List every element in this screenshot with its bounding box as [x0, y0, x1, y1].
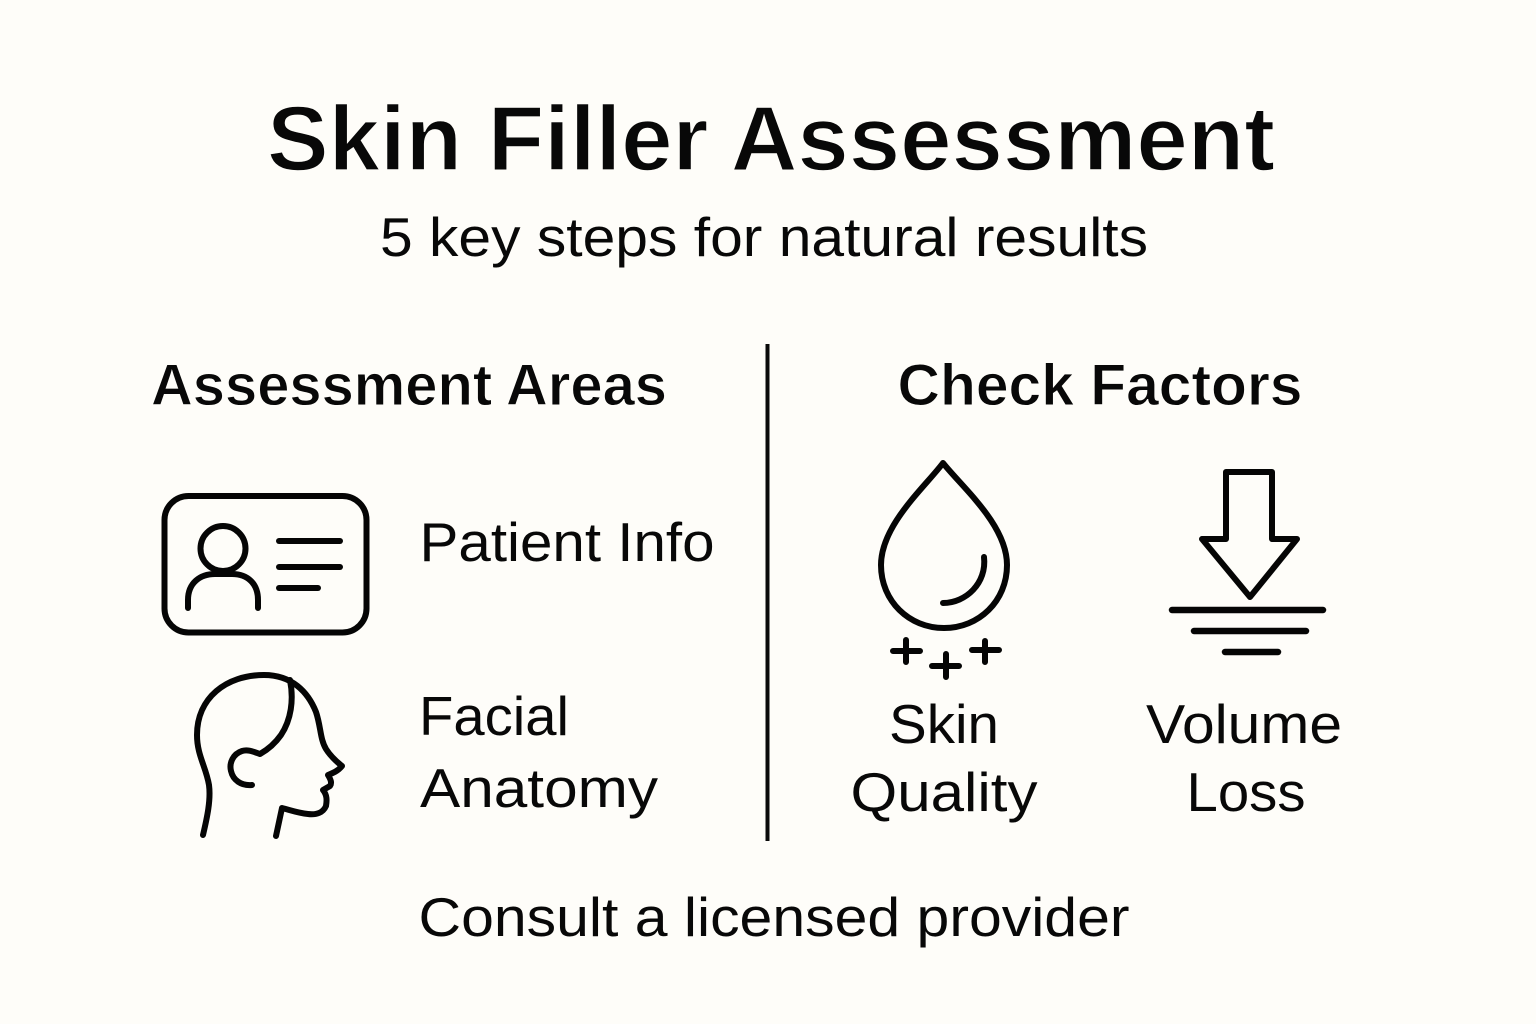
center divider: [766, 344, 770, 841]
label: facial anatomy: Anatomy: [420, 757, 659, 819]
subtitle: 5 key steps for natural results: [380, 206, 1148, 268]
label: skin quality: Skin: [889, 693, 999, 755]
icon: water drop with plus signs: [881, 463, 1007, 677]
label: skin quality: [850, 693, 1038, 823]
label: volume loss: Loss: [1186, 761, 1306, 823]
label: facial anatomy: [419, 685, 659, 819]
label: volume loss: [1146, 693, 1342, 823]
heading: assessment areas: Assessment Areas: [151, 353, 667, 418]
label: skin quality: Quality: [850, 761, 1038, 823]
label: volume loss: Volume: [1146, 693, 1342, 755]
icon: head profile: [197, 675, 342, 836]
heading: check factors: Check Factors: [898, 353, 1302, 418]
footer note: Consult a licensed provider: [418, 886, 1130, 948]
title: Skin Filler Assessment: [267, 88, 1275, 190]
icon: volume loss arrow: [1172, 472, 1323, 652]
icon: patient id card: [164, 496, 366, 632]
label: patient info: Patient Info: [420, 511, 714, 573]
label: facial anatomy: Facial: [419, 685, 569, 747]
